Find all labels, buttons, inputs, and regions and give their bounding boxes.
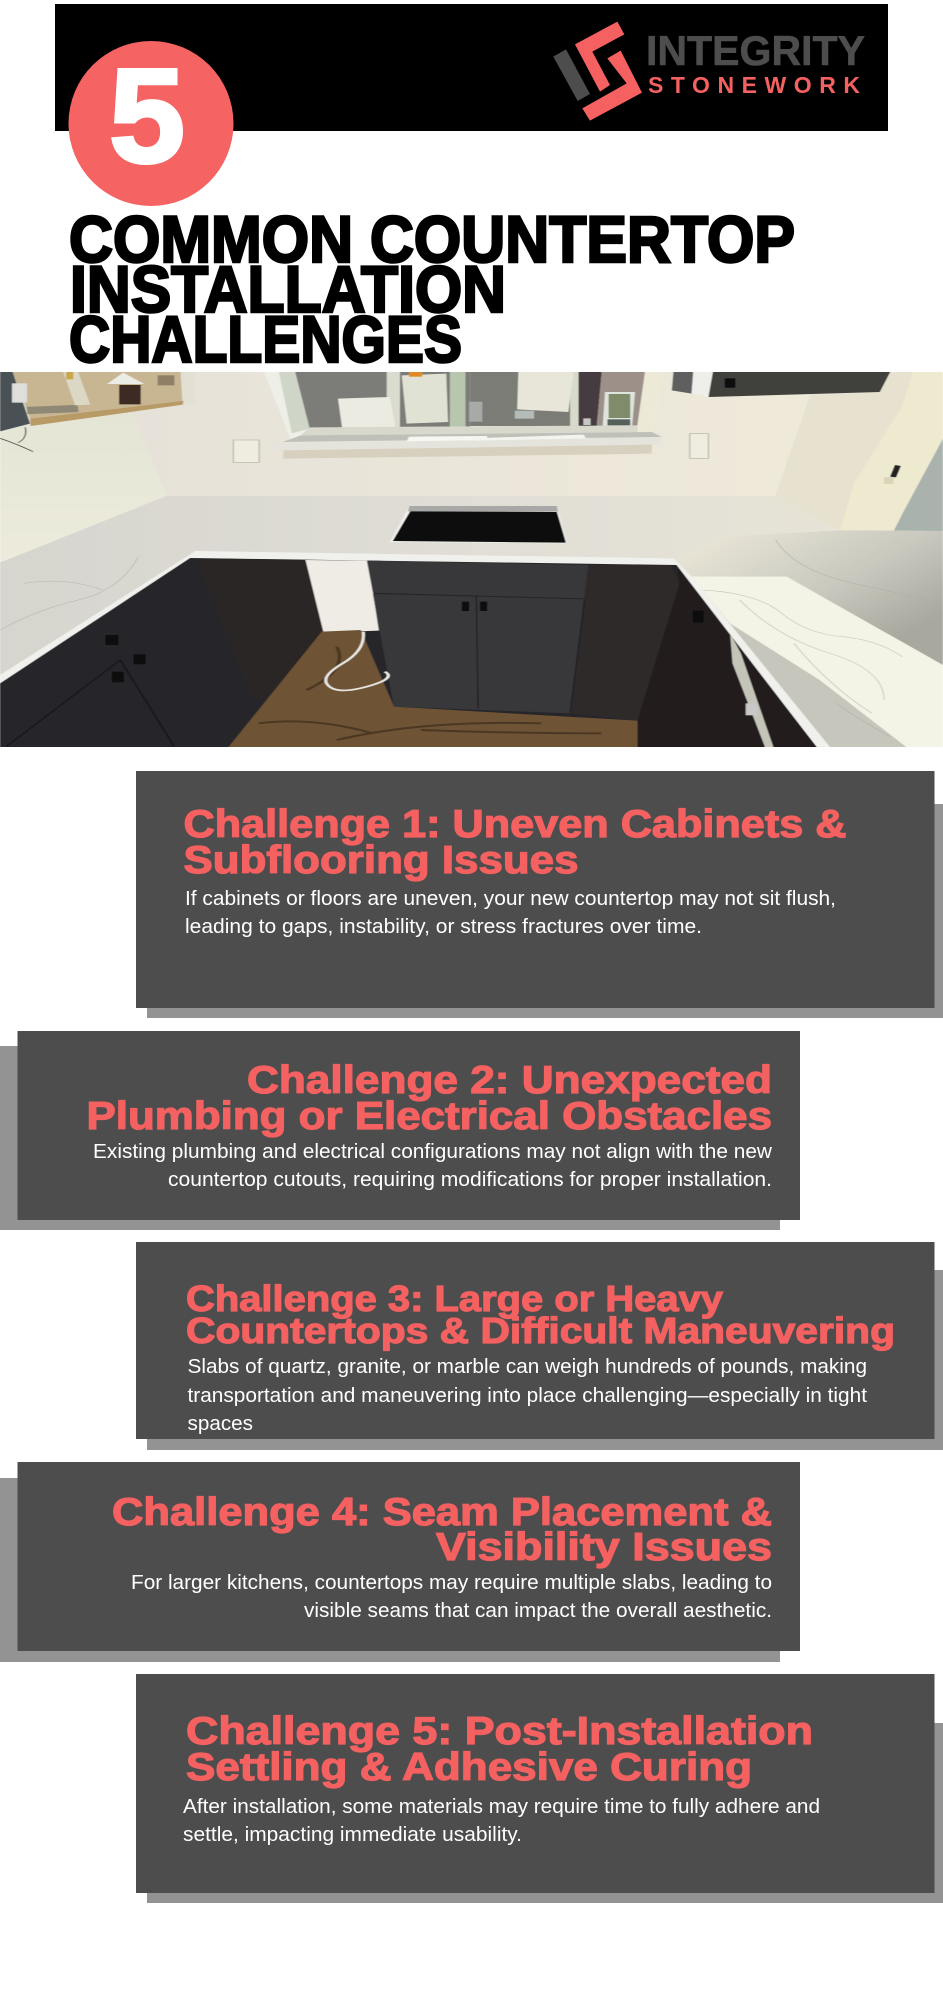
challenge 2 body: countertop cutouts, requiring modifications for proper installation. (168, 1168, 772, 1191)
icon: logo mark (553, 22, 642, 121)
challenge 4 body: For larger kitchens, countertops may require multiple slabs, leading to (131, 1571, 772, 1594)
panel: challenge 3 (136, 1242, 943, 1450)
appliance highlight (730, 633, 773, 747)
challenge 1 body (185, 887, 836, 938)
panel 3 card (136, 1242, 934, 1439)
challenge 5 body (183, 1795, 820, 1846)
logo wordmark top: INTEGRITY (646, 27, 865, 74)
sink (390, 506, 567, 543)
challenge 1 heading (184, 803, 846, 882)
floor cable (326, 632, 388, 690)
panel 1 shadow (147, 804, 943, 1018)
panel 5 shadow (147, 1723, 943, 1903)
challenge 4 body (131, 1571, 772, 1622)
challenge 3 heading (186, 1278, 895, 1351)
panel: challenge 5 (136, 1674, 943, 1903)
challenge 5 heading: Settling & Adhesive Curing (186, 1746, 752, 1789)
challenge 3 body: transportation and maneuvering into place challenging—especially in tight (188, 1384, 867, 1407)
base cabinets (0, 558, 817, 747)
challenge 2 body: Existing plumbing and electrical configurations may not align with the new (93, 1140, 772, 1163)
header bar (55, 4, 888, 131)
title: COMMON COUNTERTOP (69, 202, 795, 276)
countertop (0, 496, 943, 747)
challenge 2 heading: Challenge 2: Unexpected (247, 1059, 772, 1102)
challenge 1 heading: Subflooring Issues (184, 839, 578, 882)
challenge 5 heading (186, 1710, 813, 1789)
challenge 3 heading: Challenge 3: Large or Heavy (186, 1278, 724, 1319)
challenge 3 body (188, 1355, 867, 1435)
panel: challenge 4 (0, 1462, 800, 1662)
outlets (233, 434, 708, 462)
challenge 3 heading: Countertops & Difficult Maneuvering (186, 1310, 895, 1351)
back wall (129, 370, 812, 496)
challenge 3 body: Slabs of quartz, granite, or marble can weigh hundreds of pounds, making (188, 1355, 867, 1378)
challenge 1 heading: Challenge 1: Uneven Cabinets & (184, 803, 846, 846)
panel 1 card (136, 771, 934, 1008)
challenge 1 body: leading to gaps, instability, or stress fractures over time. (185, 915, 702, 938)
challenge 1 body: If cabinets or floors are uneven, your new countertop may not sit flush, (185, 887, 836, 910)
panel 5 card (136, 1674, 934, 1893)
wall switch (890, 465, 901, 477)
box on left wall (0, 370, 30, 431)
challenge 4 heading: Visibility Issues (436, 1526, 772, 1569)
challenge 4 body: visible seams that can impact the overall aesthetic. (304, 1599, 772, 1622)
right countertop in shadow (674, 530, 943, 666)
challenge 5 heading: Challenge 5: Post-Installation (186, 1710, 813, 1753)
cabinet handles (105, 602, 704, 682)
challenge 2 heading (86, 1059, 772, 1138)
badge number: 5 (109, 42, 185, 191)
badge circle (68, 41, 234, 206)
right wall (775, 370, 943, 530)
upper cabinet (672, 370, 891, 397)
panel 3 shadow (147, 1270, 943, 1450)
challenge 5 body: settle, impacting immediate usability. (183, 1823, 522, 1846)
marble veins (0, 540, 938, 737)
photo: installed kitchen countertop (0, 372, 943, 747)
title: INSTALLATION (70, 252, 506, 326)
window (263, 370, 663, 459)
left wall (0, 370, 167, 563)
floor (229, 630, 645, 747)
shelf (0, 370, 195, 426)
panel: challenge 1 (136, 771, 943, 1018)
center cabinet (367, 561, 588, 598)
counter edge (0, 551, 830, 747)
number badge (68, 41, 234, 206)
challenge 5 body: After installation, some materials may require time to fully adhere and (183, 1795, 820, 1818)
panel 2 shadow (0, 1046, 780, 1230)
title: CHALLENGES (69, 302, 462, 376)
challenge 3 body: spaces (188, 1412, 253, 1435)
panel 4 shadow (0, 1478, 780, 1662)
shaded marble strip (692, 577, 906, 747)
right side cabinets (637, 567, 817, 747)
panel: challenge 2 (0, 1031, 800, 1230)
challenge 4 heading (112, 1491, 772, 1569)
panel 4 card (18, 1462, 800, 1651)
challenge 2 heading: Plumbing or Electrical Obstacles (86, 1095, 772, 1138)
challenge 2 body (93, 1140, 772, 1191)
panel 2 card (18, 1031, 800, 1220)
title (69, 202, 795, 376)
logo: Integrity Stonework (553, 22, 865, 121)
challenge 4 heading: Challenge 4: Seam Placement & (112, 1491, 772, 1534)
bright sunlit patch (692, 577, 943, 747)
white wall gap (306, 560, 379, 633)
logo wordmark bottom: STONEWORK (648, 72, 860, 98)
left cabinet door seams (6, 660, 174, 747)
